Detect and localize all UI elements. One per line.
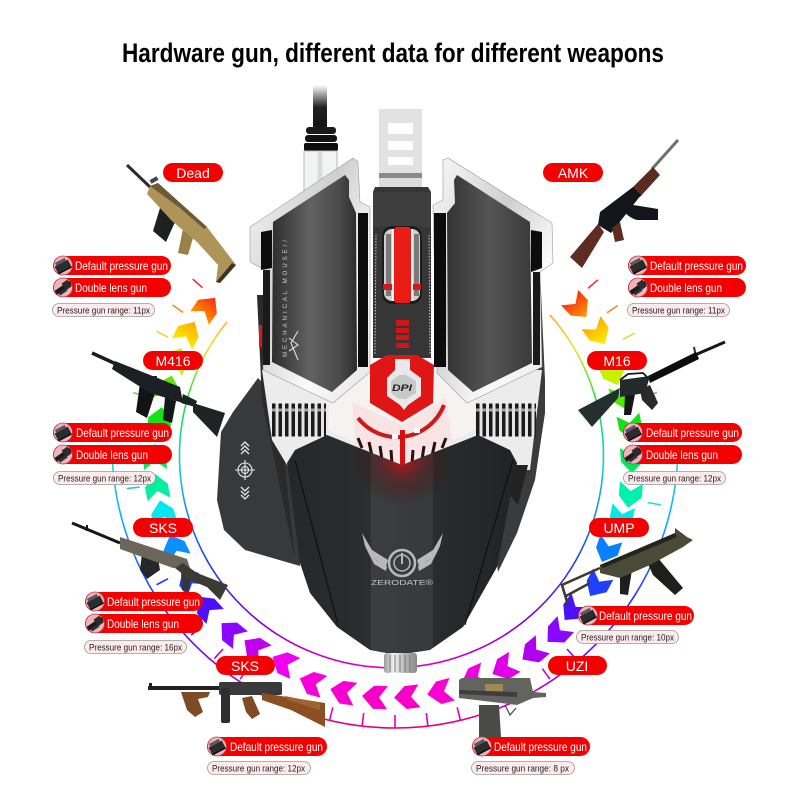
gun: Dead bbox=[127, 165, 236, 283]
label: UZI: UZI bbox=[566, 658, 588, 674]
label: SKS bottom bbox=[216, 656, 275, 675]
specs: M16: Double lens gun bbox=[646, 448, 718, 462]
palm rest bbox=[287, 435, 517, 655]
specs: SKS: Pressure gun range: 16px bbox=[89, 642, 182, 654]
specs: UMP: Default pressure gun bbox=[599, 609, 692, 623]
specs: AMK: Pressure gun range: 11px bbox=[632, 306, 725, 316]
dpi indicator lights bbox=[396, 320, 409, 348]
specs: UMP: Pressure gun range: 10px bbox=[581, 632, 674, 644]
gun: SKS left bbox=[72, 523, 228, 600]
knob bbox=[384, 653, 417, 673]
specs: SKS bottom: Pressure gun range: 12px bbox=[212, 764, 305, 774]
gun: M416 bbox=[92, 353, 225, 437]
label: AMK: AMK bbox=[558, 165, 589, 181]
specs: Dead: Default pressure gun bbox=[75, 259, 168, 273]
specs: Dead: Pressure gun range: 11px bbox=[57, 306, 150, 316]
rainbow arcs bbox=[112, 315, 678, 728]
title: Hardware gun, different data for different weapons bbox=[122, 38, 664, 68]
icon: crosshair bbox=[235, 460, 255, 480]
left spring bbox=[272, 410, 326, 420]
icon: scroll up arrows bbox=[241, 442, 249, 454]
dpi button: DPI bbox=[392, 383, 413, 393]
specs: M416: Default pressure gun bbox=[76, 426, 169, 440]
label: M416: M416 bbox=[155, 353, 191, 369]
specs: AMK: Double lens gun bbox=[650, 281, 722, 295]
specs: M16: Pressure gun range: 12px bbox=[628, 474, 721, 484]
chevron ring bbox=[143, 289, 644, 710]
brand logo bbox=[362, 533, 443, 587]
cable bbox=[304, 85, 338, 191]
side wing panel bbox=[217, 378, 300, 566]
heat fins and red arc bbox=[328, 370, 475, 465]
label: UMP: UMP bbox=[603, 520, 635, 536]
specs: UZI: Default pressure gun bbox=[494, 740, 587, 754]
label: M416 bbox=[143, 351, 203, 370]
specs: SKS: Default pressure gun bbox=[107, 595, 200, 609]
right button bbox=[433, 158, 553, 403]
specs: M416: Double lens gun bbox=[76, 448, 148, 462]
specs: M16 bbox=[623, 423, 742, 484]
mark bbox=[289, 331, 298, 360]
specs: UZI: Pressure gun range: 8 px bbox=[476, 764, 569, 774]
specs: SKS bbox=[84, 592, 203, 654]
label: SKS bottom: SKS bbox=[231, 658, 259, 674]
scroll wheel bbox=[382, 226, 422, 304]
metal top plate bbox=[379, 109, 422, 188]
label: Dead bbox=[163, 163, 223, 182]
label: SKS bbox=[133, 518, 193, 537]
radial tick marks bbox=[127, 279, 661, 728]
specs: SKS: Double lens gun bbox=[107, 617, 179, 631]
dpi button bbox=[370, 355, 434, 422]
specs: UMP bbox=[576, 606, 694, 644]
centre panel bbox=[373, 187, 431, 358]
specs: AMK bbox=[628, 256, 746, 316]
gun: UZI bbox=[459, 678, 546, 737]
specs: Dead bbox=[52, 256, 171, 316]
specs: SKS bottom bbox=[207, 737, 327, 774]
icon: scroll down arrows bbox=[241, 487, 249, 499]
specs: Dead: Double lens gun bbox=[75, 281, 147, 295]
label: UMP bbox=[589, 518, 649, 537]
gun: AMK bbox=[570, 140, 678, 268]
label: M16 bbox=[587, 351, 647, 370]
specs: M16: Default pressure gun bbox=[646, 426, 739, 440]
specs: SKS bottom: Default pressure gun bbox=[230, 740, 323, 754]
specs: AMK: Default pressure gun bbox=[650, 259, 743, 273]
specs: M416 bbox=[53, 423, 172, 484]
label: SKS: SKS bbox=[149, 520, 177, 536]
label: M16: M16 bbox=[603, 353, 631, 369]
gun: Thompson bbox=[148, 682, 325, 727]
body shell bbox=[257, 270, 545, 572]
gun: UMP bbox=[562, 528, 693, 605]
brand logo: ZERODATE® bbox=[371, 579, 434, 587]
gaming mouse bbox=[217, 85, 553, 673]
right spring bbox=[476, 410, 536, 420]
label: UZI bbox=[548, 656, 607, 675]
left button bbox=[250, 158, 370, 403]
vertical text: MECHANICAL MOUSE// bbox=[283, 240, 289, 357]
label: AMK bbox=[543, 163, 603, 182]
specs: UZI bbox=[472, 737, 590, 774]
gun: M16 bbox=[578, 342, 725, 427]
label: Dead: Dead bbox=[176, 165, 210, 181]
specs: M416: Pressure gun range: 12px bbox=[58, 474, 151, 484]
